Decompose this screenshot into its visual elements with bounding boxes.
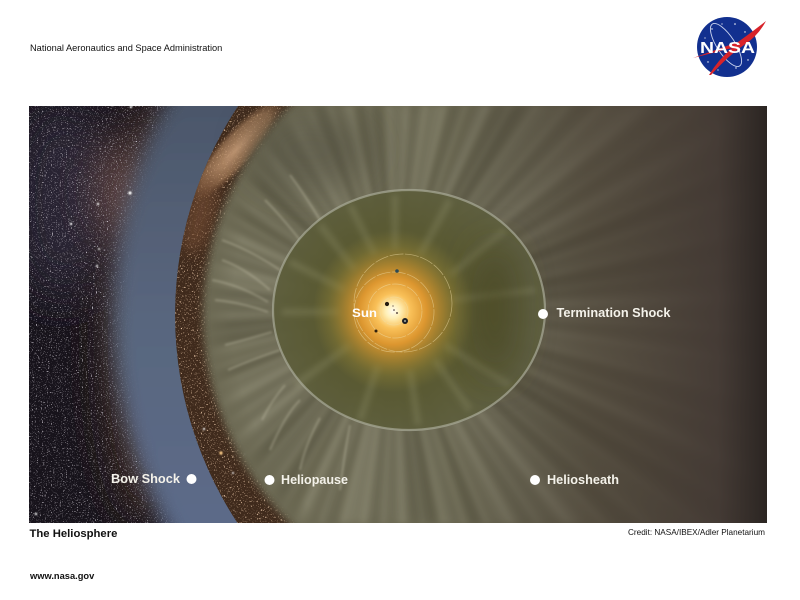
image credit: Credit: NASA/IBEX/Adler Planetarium bbox=[628, 528, 765, 537]
icon: NASA logo bbox=[693, 17, 766, 77]
panel: heliosphere illustration bbox=[29, 106, 767, 523]
planetary orbits bbox=[354, 254, 452, 352]
label: Heliosheath: Heliosheath bbox=[547, 473, 619, 487]
bow shock band bbox=[113, 80, 800, 550]
sun glow bbox=[313, 231, 473, 391]
termination shock ring bbox=[273, 190, 545, 430]
label: Bow Shock: Bow Shock bbox=[111, 472, 180, 486]
dark right interior bbox=[471, 240, 519, 380]
inner rays bbox=[282, 195, 535, 425]
icon: NASA logo: NASA bbox=[700, 40, 755, 57]
label: Termination Shock: Termination Shock bbox=[556, 306, 671, 320]
brown interstellar band bbox=[175, 106, 296, 523]
header text: agency name: National Aeronautics and Space Administration bbox=[30, 42, 222, 52]
heliosheath body bbox=[203, 80, 800, 550]
label: Heliopause: Heliopause bbox=[281, 473, 348, 487]
bright stars bbox=[35, 106, 246, 515]
top left dark fade of the sheath bbox=[250, 110, 370, 190]
website: www.nasa.gov bbox=[30, 571, 94, 581]
curved wisps, termination shock and solar system bbox=[111, 106, 767, 523]
star field bbox=[29, 106, 269, 523]
right side dark fade bbox=[430, 106, 767, 523]
planets bbox=[374, 269, 408, 332]
space background with stars and shock bands bbox=[29, 106, 704, 523]
nebula glow bbox=[10, 90, 192, 520]
radial plasma rays bbox=[218, 106, 620, 523]
termination shock interior bbox=[273, 190, 545, 430]
caption title: The Heliosphere bbox=[30, 528, 117, 540]
curved wisps bbox=[212, 175, 350, 490]
label: Sun: Sun bbox=[352, 306, 377, 320]
